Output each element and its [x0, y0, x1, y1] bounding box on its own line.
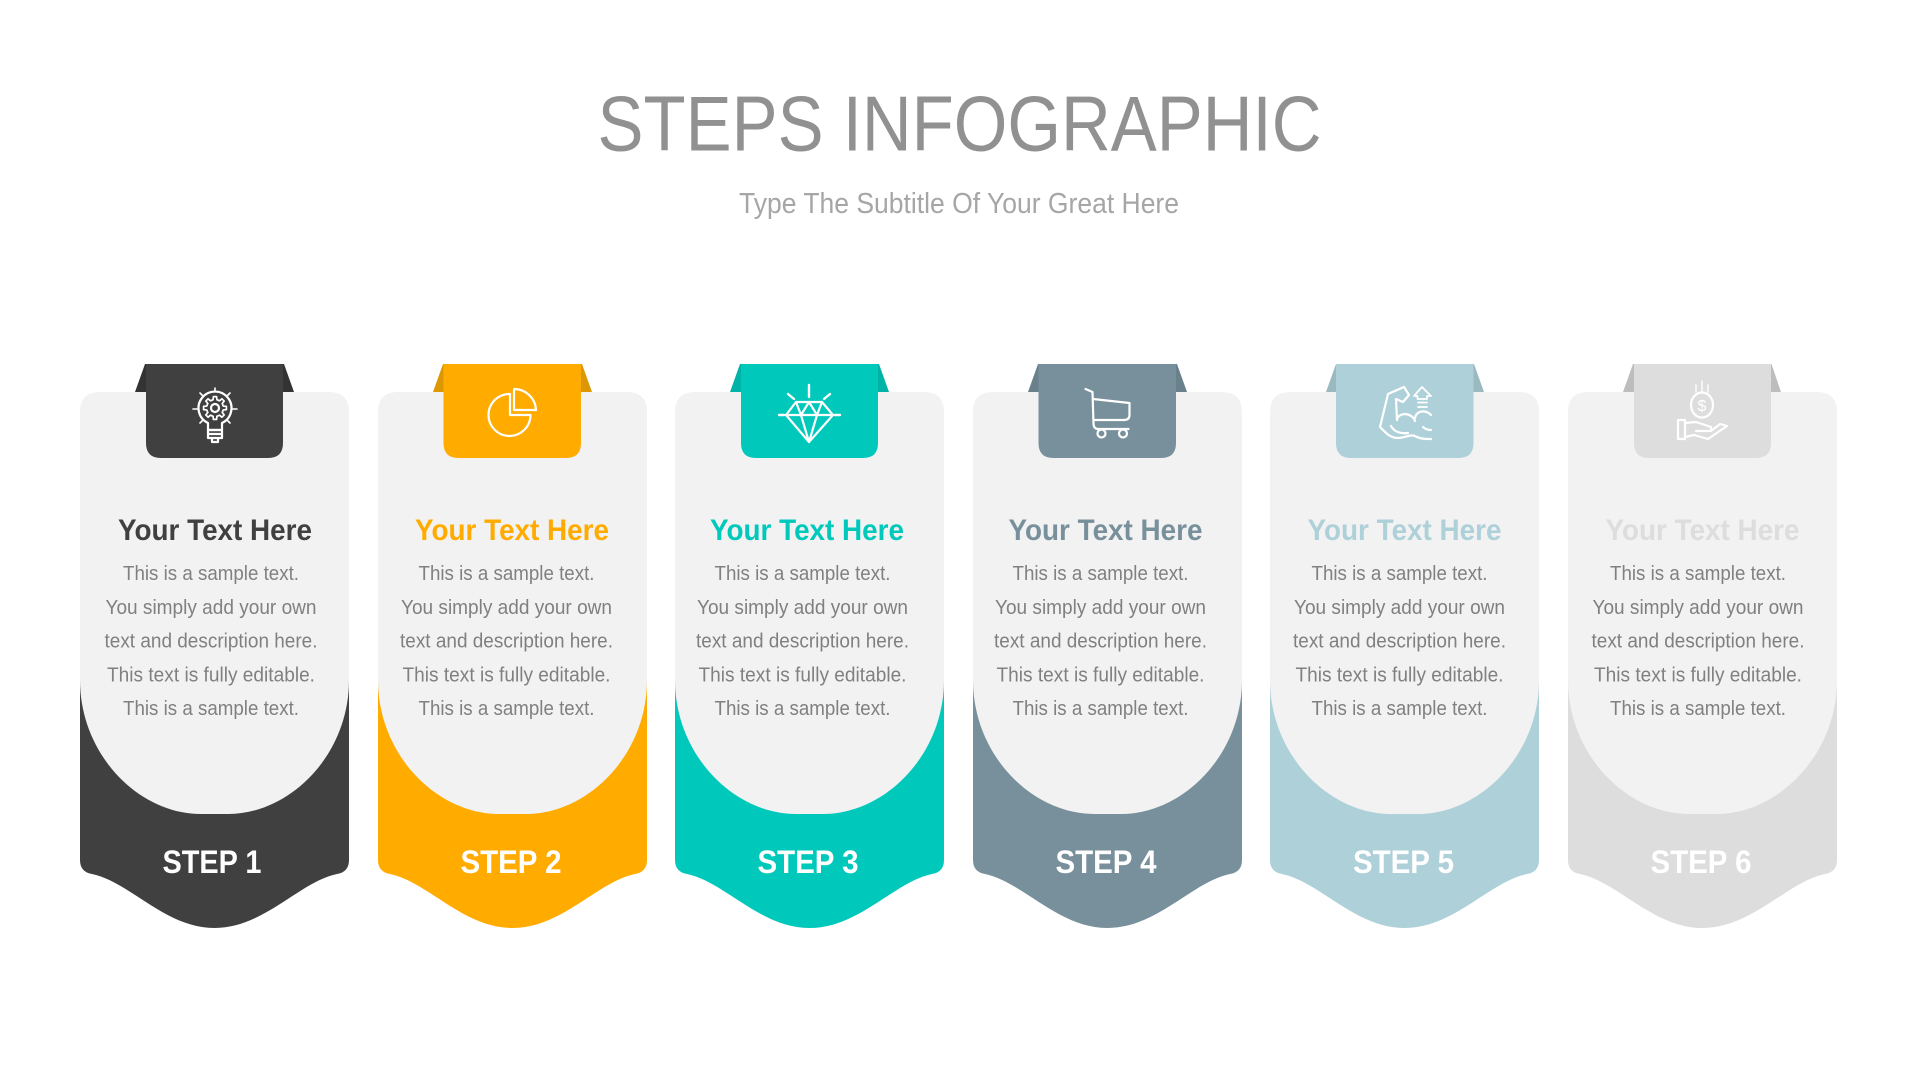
- panel: step 3: [675, 364, 944, 928]
- description: step 3: This is a sample text.: [714, 697, 890, 720]
- description: step 3: [696, 562, 909, 720]
- heading: step 3: Your Text Here: [710, 514, 904, 547]
- description: step 4: [994, 562, 1207, 720]
- description: step 1: text and description here.: [104, 630, 318, 652]
- description: step 1: This text is fully editable.: [107, 664, 315, 686]
- description: step 6: You simply add your own: [1592, 596, 1804, 619]
- description: step 6: text and description here.: [1592, 630, 1804, 652]
- description: step 6: This is a sample text.: [1610, 562, 1786, 585]
- title: STEPS INFOGRAPHIC: [598, 80, 1322, 168]
- card shapes: step 5: [1270, 364, 1539, 928]
- subtitle: Type The Subtitle Of Your Great Here: [739, 188, 1179, 220]
- description: step 4: This text is fully editable.: [996, 664, 1204, 686]
- step label: step 3: STEP 3: [758, 844, 858, 880]
- description: step 5: This text is fully editable.: [1296, 664, 1504, 686]
- description: step 4: You simply add your own: [995, 596, 1206, 619]
- heading: step 6: Your Text Here: [1606, 514, 1800, 547]
- description: step 4: text and description here.: [994, 630, 1207, 652]
- card shapes: step 4: [973, 364, 1242, 928]
- step label: step 1: STEP 1: [162, 844, 262, 880]
- heading: step 5: Your Text Here: [1308, 514, 1502, 547]
- panel: step 5: [1270, 364, 1539, 928]
- step label: step 6: STEP 6: [1650, 844, 1752, 880]
- description: step 4: This is a sample text.: [1012, 562, 1188, 585]
- description: step 6: [1592, 562, 1804, 720]
- panel: step 2: [378, 364, 647, 928]
- step label: step 2: STEP 2: [460, 844, 562, 880]
- description: step 3: text and description here.: [696, 630, 909, 652]
- description: step 3: This is a sample text.: [714, 562, 890, 585]
- icon: light bulb with gear: [193, 388, 237, 442]
- description: step 2: You simply add your own: [401, 596, 612, 619]
- description: step 3: You simply add your own: [697, 596, 908, 619]
- description: step 1: [104, 562, 318, 720]
- card shapes: step 2: [378, 364, 647, 928]
- heading: step 2: Your Text Here: [415, 514, 609, 547]
- card shapes: step 6: [1568, 364, 1837, 928]
- panel: step 1: [80, 364, 349, 928]
- description: step 5: [1293, 562, 1506, 720]
- panel: step 4: [973, 364, 1242, 928]
- description: step 5: You simply add your own: [1294, 596, 1505, 619]
- icon: diamond: [779, 385, 840, 442]
- heading: step 4: Your Text Here: [1008, 514, 1202, 547]
- description: step 1: This is a sample text.: [123, 697, 299, 720]
- description: step 5: This is a sample text.: [1312, 697, 1488, 720]
- icon: pie chart: [489, 389, 536, 436]
- description: step 5: This is a sample text.: [1312, 562, 1488, 585]
- description: step 2: [400, 562, 613, 720]
- description: step 1: You simply add your own: [106, 596, 316, 619]
- description: step 2: This text is fully editable.: [402, 664, 610, 686]
- icon: shopping cart: [1086, 389, 1130, 438]
- icon: flexed arm with up arrow: [1380, 387, 1431, 439]
- heading: step 1: Your Text Here: [118, 514, 312, 547]
- icon: hand holding coin: [1678, 381, 1727, 439]
- description: step 1: This is a sample text.: [123, 562, 299, 585]
- icon: hand holding coin: $: [1698, 398, 1707, 415]
- step label: step 4: STEP 4: [1056, 844, 1157, 880]
- panel: step 6: [1568, 364, 1837, 928]
- description: step 2: This is a sample text.: [418, 697, 594, 720]
- description: step 2: This is a sample text.: [418, 562, 594, 585]
- description: step 6: This is a sample text.: [1610, 697, 1786, 720]
- description: step 2: text and description here.: [400, 630, 613, 652]
- description: step 3: This text is fully editable.: [698, 664, 906, 686]
- description: step 6: This text is fully editable.: [1594, 664, 1802, 686]
- card shapes: step 1: [80, 364, 349, 928]
- step label: step 5: STEP 5: [1353, 844, 1454, 880]
- card shapes: step 3: [675, 364, 944, 928]
- description: step 5: text and description here.: [1293, 630, 1506, 652]
- description: step 4: This is a sample text.: [1012, 697, 1188, 720]
